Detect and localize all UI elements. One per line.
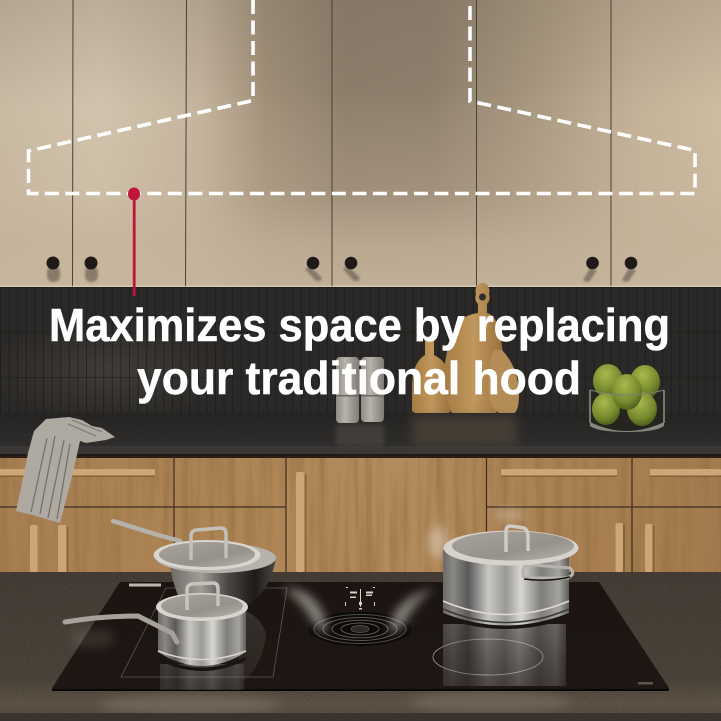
island countertop xyxy=(0,572,721,721)
lid xyxy=(444,530,578,566)
headline xyxy=(49,299,670,404)
salt and pepper bottles xyxy=(336,357,384,423)
handle shadows xyxy=(0,474,721,572)
dark tiled backsplash xyxy=(0,287,721,420)
cutting boards xyxy=(412,283,519,415)
left cooking zone outline xyxy=(121,588,287,677)
central downdraft vent xyxy=(308,612,412,646)
lid handle xyxy=(187,583,218,610)
brand mark xyxy=(129,584,161,586)
back counter xyxy=(0,413,721,457)
small saucepan, front left xyxy=(65,583,248,671)
headline: your traditional hood xyxy=(137,352,581,404)
lid handle xyxy=(191,528,226,560)
bowl of green apples xyxy=(590,364,664,432)
pan and pot reflections on glass xyxy=(72,604,566,690)
side handle xyxy=(523,565,573,578)
touch controls xyxy=(345,587,375,610)
red callout marker and leader line xyxy=(128,188,140,296)
upper cabinets xyxy=(0,0,721,288)
lid xyxy=(156,593,248,621)
induction cooktop xyxy=(52,582,669,691)
lower wooden cabinets xyxy=(0,456,721,574)
right induction ring xyxy=(433,639,543,675)
cabinet handles xyxy=(0,469,721,572)
knob shadows and cabinet knobs xyxy=(46,256,637,282)
headline: Maximizes space by replacing xyxy=(49,299,670,351)
large stock pot, right xyxy=(443,526,578,629)
steam rising into the vent xyxy=(283,509,526,634)
saute pan, back left xyxy=(113,521,276,604)
lid handle xyxy=(506,526,528,552)
folded kitchen towel xyxy=(16,417,115,523)
long handle xyxy=(113,521,180,541)
long handle xyxy=(65,616,177,642)
dashed hood outline xyxy=(28,0,695,194)
maker label xyxy=(638,682,653,684)
